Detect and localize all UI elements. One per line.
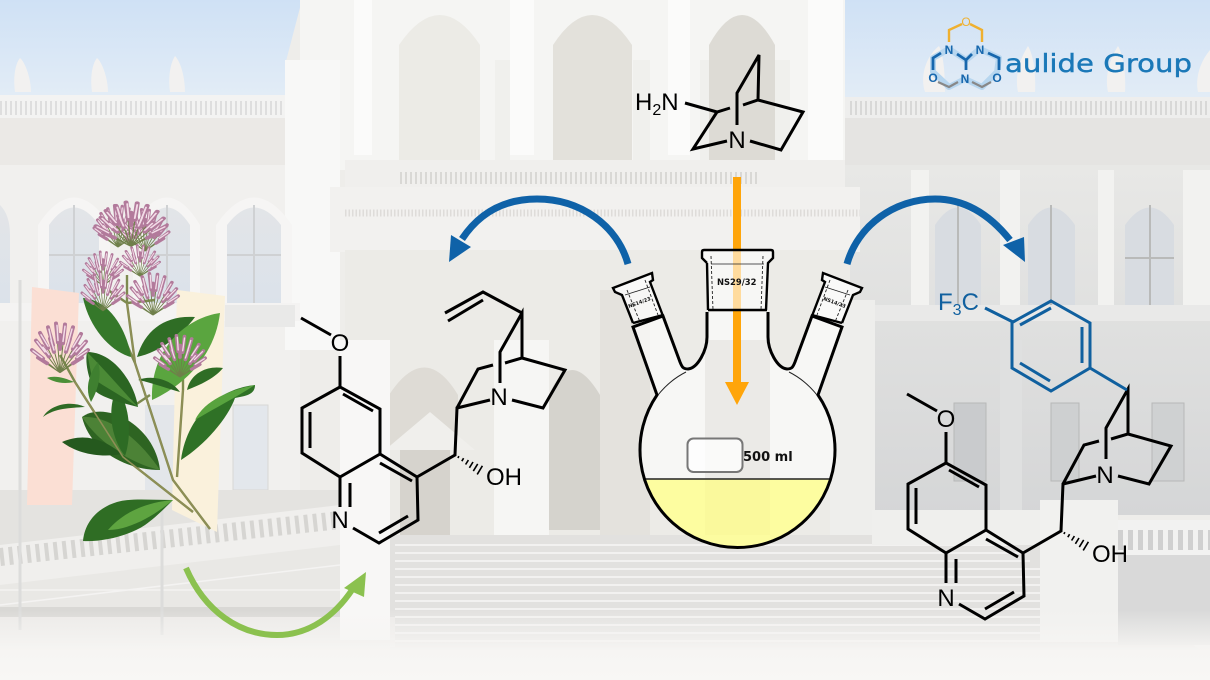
- logo: Maulide Group: N: [976, 43, 984, 57]
- molecule: quinine: N: [490, 384, 508, 411]
- molecule: CF3-aryl quinine derivative: N: [1096, 462, 1114, 489]
- flask: three-neck round-bottom flask: NS14/23: [628, 296, 652, 310]
- molecule: 3-aminoquinuclidine reagent: 2: [652, 102, 661, 119]
- molecule: 3-aminoquinuclidine reagent: H: [635, 89, 652, 116]
- molecule: CF3-aryl quinine derivative: [907, 289, 1171, 619]
- molecule: quinine: N: [331, 507, 349, 534]
- molecule: quinine: [301, 292, 565, 543]
- molecule: CF3-aryl quinine derivative: OH: [1092, 541, 1128, 568]
- flask: three-neck round-bottom flask: NS14/23: [822, 296, 847, 310]
- arrow: blue curved to product: [847, 199, 1025, 264]
- logo: Maulide Group: O: [961, 15, 971, 29]
- flask: three-neck round-bottom flask: NS29/32: [717, 277, 757, 287]
- molecule: CF3-aryl quinine derivative: O: [937, 406, 955, 433]
- flask: three-neck round-bottom flask: [613, 177, 862, 549]
- molecule: CF3-aryl quinine derivative: N: [937, 585, 955, 612]
- plant illustration: cinchona branch: [32, 202, 255, 541]
- logo: Maulide Group: aulide Group: [1005, 49, 1192, 78]
- logo: Maulide Group: O: [992, 71, 1002, 85]
- molecule: 3-aminoquinuclidine reagent: N: [728, 127, 746, 154]
- molecule: CF3-aryl quinine derivative: 3: [953, 302, 962, 319]
- logo: Maulide Group: O: [928, 71, 938, 85]
- arrow: green from plant to quinine: [186, 568, 366, 635]
- molecule: 3-aminoquinuclidine reagent: [635, 55, 803, 154]
- molecule: CF3-aryl quinine derivative: F: [938, 289, 953, 316]
- logo: Maulide Group: [928, 15, 1192, 87]
- arrow: orange reagent addition: [725, 177, 749, 405]
- logo: Maulide Group: N: [961, 72, 969, 86]
- molecule: quinine: OH: [486, 464, 522, 491]
- molecule: CF3-aryl quinine derivative: C: [962, 289, 979, 316]
- molecule: quinine: O: [331, 330, 349, 357]
- flask: three-neck round-bottom flask: 500 ml: [743, 450, 793, 465]
- arrow: blue curved to quinine: [449, 199, 628, 264]
- logo: Maulide Group: N: [945, 43, 953, 57]
- molecule: 3-aminoquinuclidine reagent: N: [661, 89, 679, 116]
